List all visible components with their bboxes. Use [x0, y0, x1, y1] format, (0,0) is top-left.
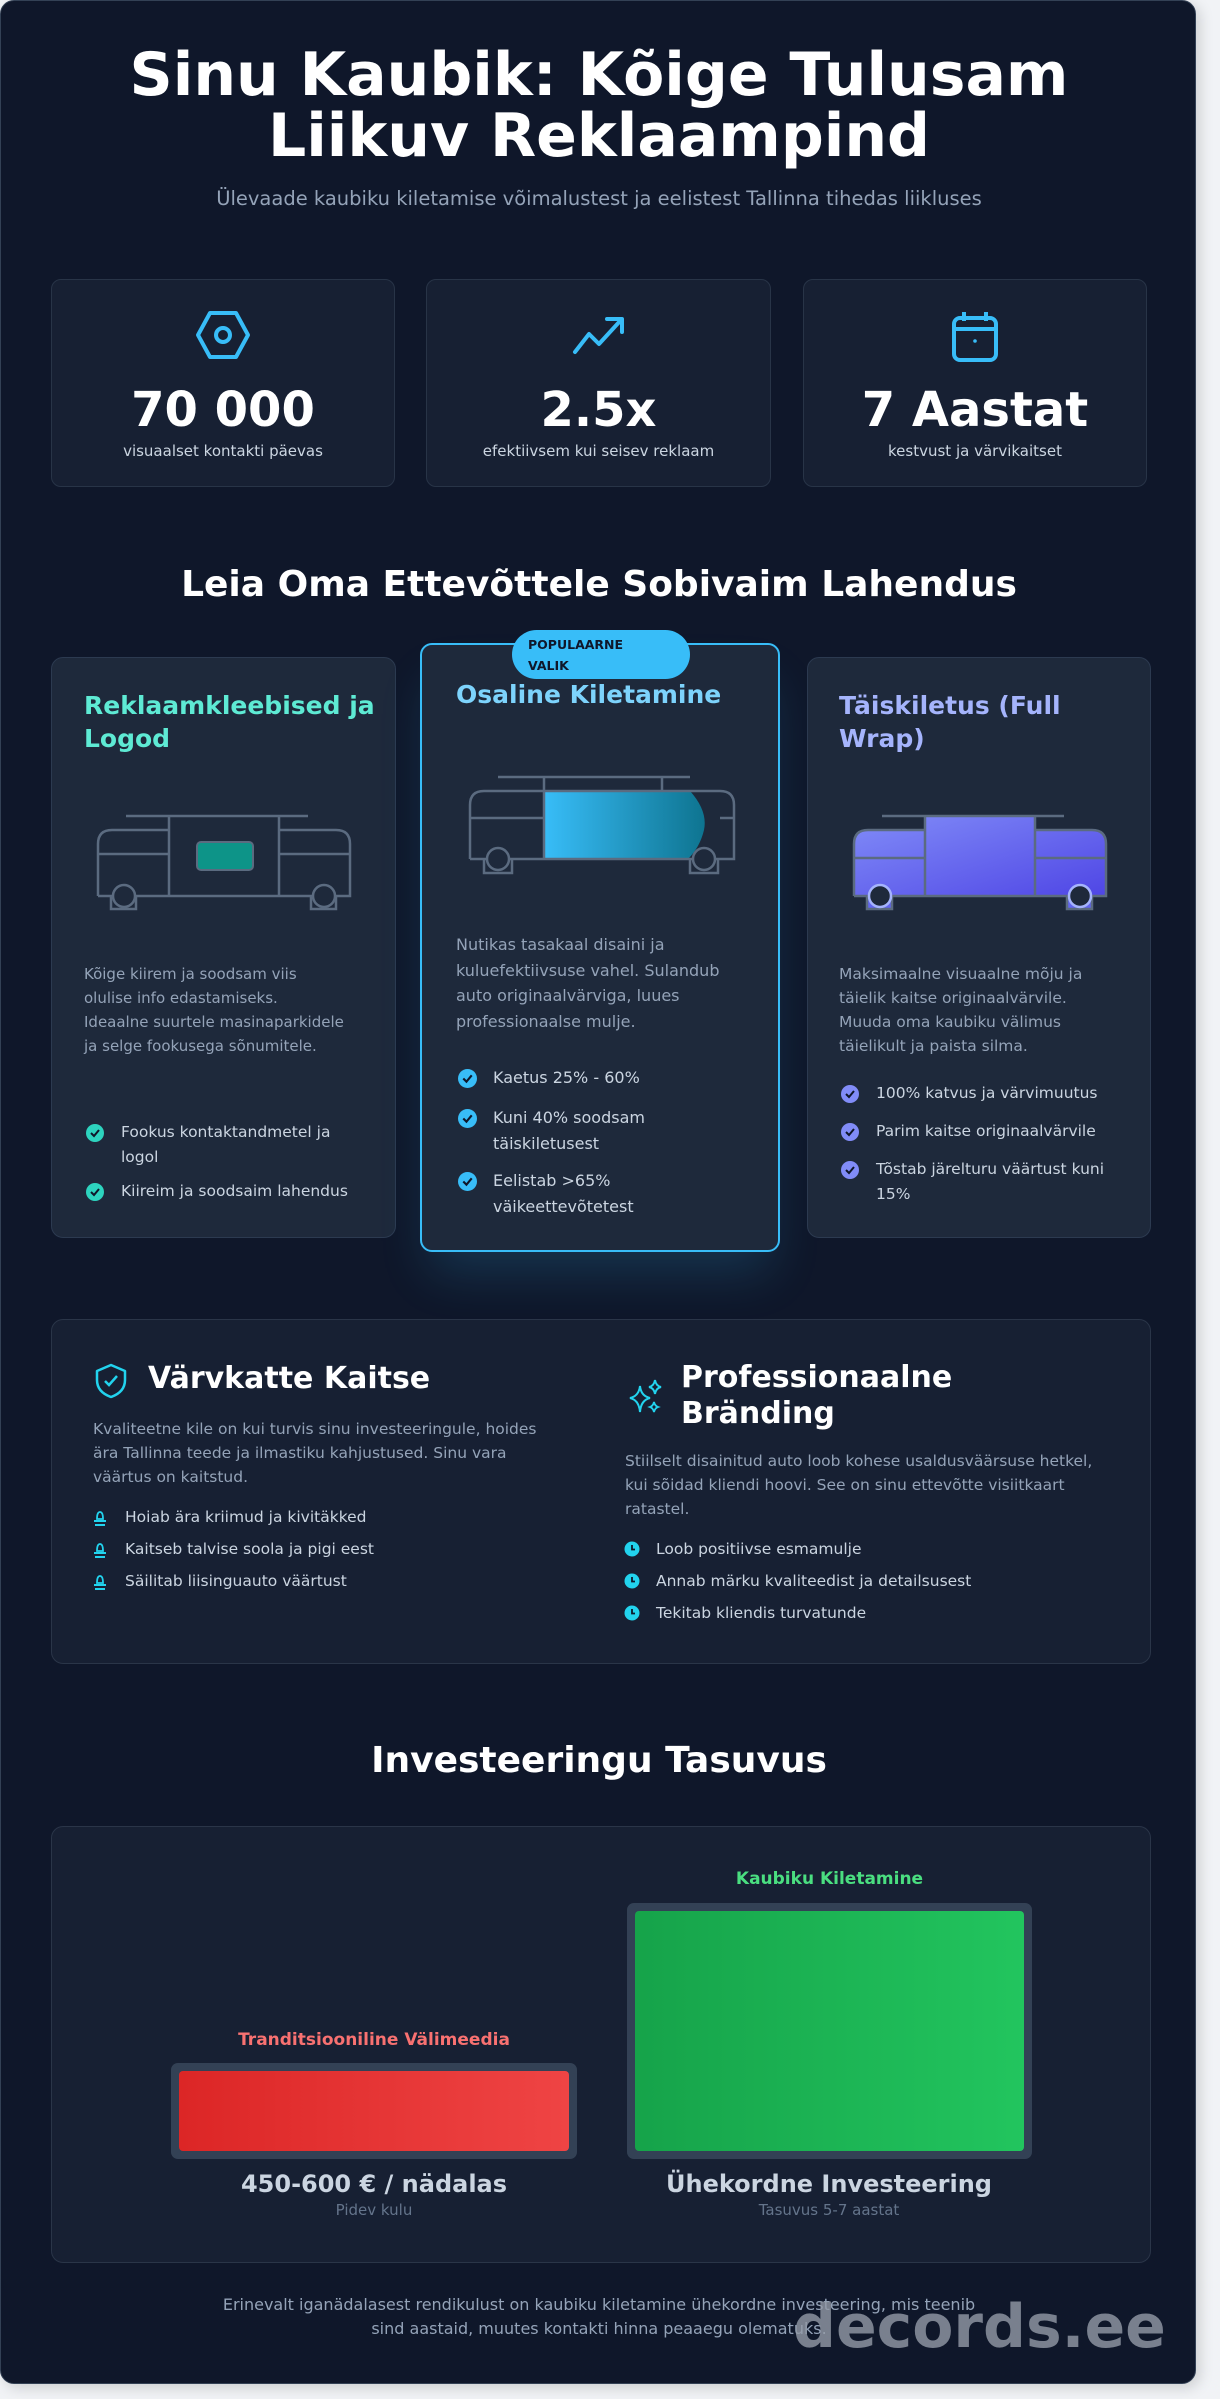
- title: Sinu Kaubik: Kõige Tulusam: [130, 40, 1068, 110]
- title: [130, 40, 1068, 171]
- heading: paint protection: Värvkatte Kaitse: [148, 1361, 430, 1396]
- list: protection bullets: [94, 1508, 374, 1590]
- icon: hexagon: [196, 311, 250, 359]
- plan description: Nutikas tasakaal disaini ja kuluefektiivsuse vahel. Sulandub auto originaalvärviga, luues professionaalse mulje.: [456, 935, 719, 1030]
- plan title: Logod: [84, 724, 170, 753]
- text: paint protection: Kvaliteetne kile on kui turvis sinu investeeringule, hoides ära Tallinna teede ja ilmastiku kahjustused. Sinu vara väärtus on kaitstud.: [93, 1420, 537, 1486]
- plan description: Kõige kiirem ja soodsam viis: [84, 965, 297, 983]
- plan description: [84, 965, 344, 1055]
- bar: traditional media: [171, 2063, 577, 2159]
- section heading: ROI: Investeeringu Tasuvus: [371, 1740, 827, 1781]
- watermark: decords.ee: [793, 2292, 1166, 2362]
- panel: benefits: [51, 1319, 1151, 1664]
- plan title: Reklaamkleebised ja: [84, 691, 375, 720]
- plan description: Maksimaalne visuaalne mõju ja täielik kaitse originaalvärvile. Muuda oma kaubiku välimus täielikult ja paista silma.: [839, 965, 1082, 1055]
- value: one-time investment: Ühekordne Investeering: [666, 2170, 992, 2198]
- bullet: Kiireim ja soodsaim lahendus: [121, 1182, 348, 1200]
- list: branding bullets: [624, 1540, 971, 1622]
- icon: shield: [96, 1364, 126, 1398]
- section heading: solutions: Leia Oma Ettevõttele Sobivaim Lahendus: [181, 564, 1017, 605]
- label: van wrap: Kaubiku Kiletamine: [736, 1869, 923, 1889]
- icon: sparkles: [630, 1380, 662, 1412]
- plan title: [84, 691, 375, 753]
- title: Liikuv Reklaampind: [268, 101, 930, 171]
- stat card: contacts: [51, 279, 395, 487]
- bullet: 100% katvus ja värvimuutus: [876, 1084, 1098, 1102]
- bar: van wrap: [627, 1903, 1032, 2159]
- bullet list: [458, 1068, 645, 1216]
- stat label: visuaalset kontakti päevas: [123, 442, 323, 460]
- bullet: Annab märku kvaliteedist ja detailsusest: [656, 1572, 971, 1590]
- icon: van with logo: [96, 814, 352, 910]
- panel: full wrap: [807, 657, 1151, 1238]
- bullet: Tõstab järelturu väärtust kuni 15%: [876, 1160, 1104, 1203]
- footer note: Erinevalt iganädalasest rendikulust on kaubiku kiletamine ühekordne investeering, mis teenib: [223, 2295, 975, 2314]
- stat number: 7 Aastat: [862, 382, 1088, 438]
- panel: stickers and logos: [51, 657, 396, 1238]
- heading: professional branding: Professionaalne: [681, 1360, 952, 1395]
- bullet list: [841, 1084, 1104, 1203]
- icon: van partial wrap: [468, 776, 736, 874]
- bullet list: [86, 1123, 348, 1201]
- bullet: Loob positiivse esmamulje: [656, 1540, 861, 1558]
- footer note: [223, 2295, 975, 2338]
- stat label: efektiivsem kui seisev reklaam: [483, 442, 714, 460]
- caption: payback: Tasuvus 5-7 aastat: [759, 2201, 899, 2219]
- bullet: Kaitseb talvise soola ja pigi eest: [125, 1540, 374, 1558]
- badge: popular choice: [512, 630, 690, 679]
- stat card: effectiveness: [426, 279, 771, 487]
- plan title: [839, 691, 1061, 753]
- icon: calendar: [952, 312, 998, 362]
- bullet: Kaetus 25% - 60%: [493, 1068, 640, 1087]
- label: traditional media: Tranditsiooniline Välimeedia: [238, 2030, 510, 2050]
- bullet: Kuni 40% soodsam täiskiletusest: [493, 1108, 645, 1153]
- bullet: Fookus kontaktandmetel ja logol: [121, 1123, 330, 1166]
- heading: professional branding: Bränding: [681, 1396, 835, 1431]
- stat number: 2.5x: [540, 382, 656, 438]
- bullet: Parim kaitse originaalvärvile: [876, 1122, 1096, 1140]
- icon: trending up: [572, 317, 624, 354]
- bullet: Tekitab kliendis turvatunde: [656, 1604, 866, 1622]
- text: branding: Stiilselt disainitud auto loob kohese usaldusväärsuse hetkel, kui sõidad kliendi hoovi. See on sinu ettevõtte visiitkaart ratastel.: [625, 1452, 1092, 1518]
- subtitle: Ülevaade kaubiku kiletamise võimalustest ja eelistest Tallinna tihedas liikluses: [216, 187, 982, 210]
- bullet: Hoiab ära kriimud ja kivitäkked: [125, 1508, 366, 1526]
- plan title: Täiskiletus (Full: [839, 691, 1061, 720]
- icon: van full wrap: [852, 814, 1108, 910]
- bullet: Säilitab liisinguauto väärtust: [125, 1572, 347, 1590]
- heading: professional branding: [681, 1360, 952, 1431]
- stat label: kestvust ja värvikaitset: [888, 442, 1062, 460]
- panel: partial wrap (featured): [420, 643, 780, 1252]
- plan title: Wrap): [839, 724, 925, 753]
- bullet: Eelistab >65% väikeettevõtetest: [493, 1171, 634, 1216]
- badge: popular choice: POPULAARNE: [528, 637, 623, 652]
- value: weekly cost: 450-600 € / nädalas: [241, 2170, 507, 2198]
- caption: ongoing cost: Pidev kulu: [336, 2201, 412, 2219]
- plan description: olulise info edastamiseks.: [84, 989, 278, 1007]
- stat number: 70 000: [131, 382, 315, 438]
- footer note: sind aastaid, muutes kontakti hinna peaaegu olematuks.: [371, 2319, 827, 2338]
- plan description: ja selge fookusega sõnumitele.: [84, 1037, 317, 1055]
- plan description: Ideaalne suurtele masinaparkidele: [84, 1013, 344, 1031]
- badge: popular choice: VALIK: [528, 658, 569, 673]
- panel: ROI bar chart: [51, 1826, 1151, 2263]
- stat card: durability: [803, 279, 1147, 487]
- plan title: Osaline Kiletamine: [456, 680, 721, 709]
